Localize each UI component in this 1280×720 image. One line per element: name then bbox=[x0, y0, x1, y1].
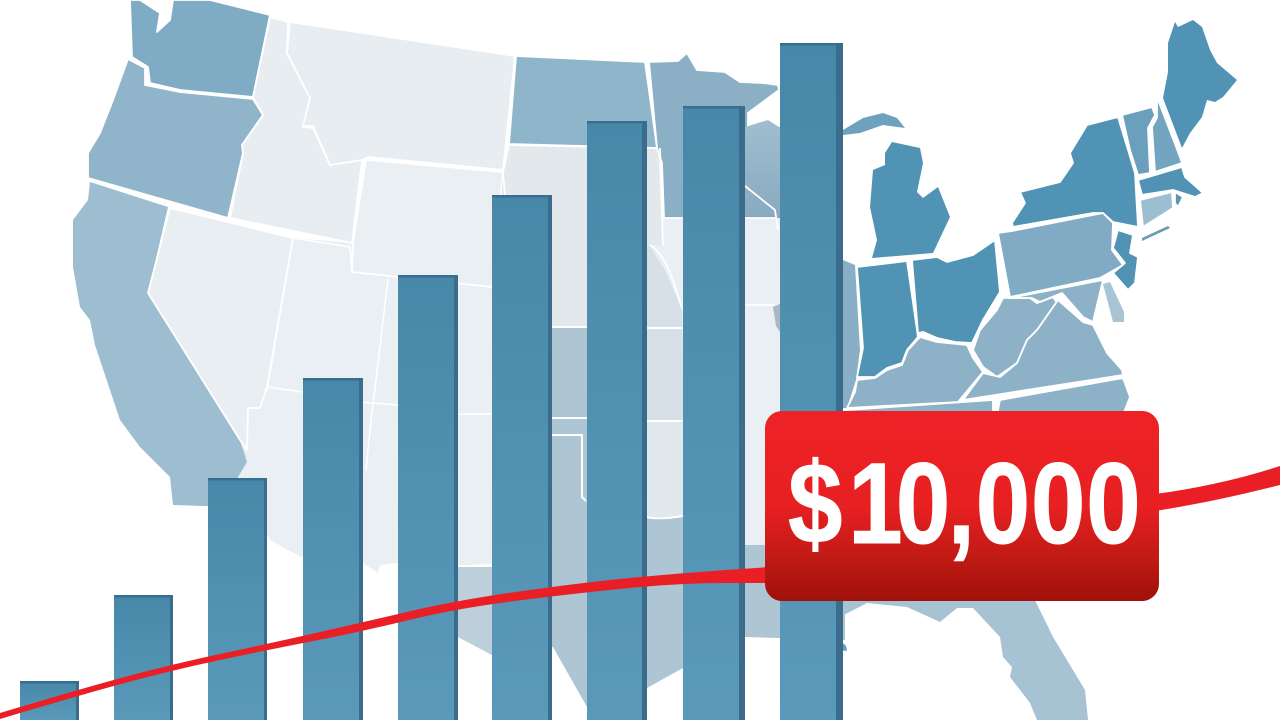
Idaho bbox=[230, 17, 362, 243]
Indiana bbox=[857, 261, 918, 377]
central states base bbox=[238, 150, 780, 573]
Missouri area bbox=[646, 246, 684, 421]
Michigan upper peninsula bbox=[843, 113, 905, 135]
Florida and Gulf coast bbox=[840, 590, 1088, 720]
Maryland bbox=[1010, 280, 1103, 322]
red trend line left bbox=[0, 567, 770, 719]
red trend line right bbox=[1155, 466, 1280, 511]
Rhode Island bbox=[1175, 192, 1183, 207]
Ohio bbox=[912, 240, 1000, 343]
Kansas and Oklahoma borders bbox=[456, 327, 684, 566]
South Dakota and Nebraska bbox=[492, 146, 662, 327]
bar 3 bbox=[208, 478, 267, 720]
bar 6 bbox=[492, 195, 552, 720]
Washington bbox=[130, 0, 270, 97]
Wisconsin bbox=[745, 120, 785, 218]
bar chart bbox=[20, 43, 843, 720]
North Carolina bbox=[997, 378, 1130, 415]
Texas and south central bbox=[456, 327, 845, 707]
New Jersey bbox=[1113, 230, 1138, 290]
bar 9 bbox=[780, 43, 843, 720]
Vermont bbox=[1122, 107, 1155, 175]
Montana bbox=[287, 22, 515, 170]
Illinois boundary lines bbox=[650, 148, 778, 310]
Minnesota bbox=[649, 53, 779, 218]
Massachusetts bbox=[1138, 167, 1203, 197]
bar 4 bbox=[303, 378, 363, 720]
Nevada bbox=[148, 208, 293, 450]
Michigan lower peninsula bbox=[870, 142, 950, 258]
Oregon bbox=[88, 59, 263, 218]
Kansas area bbox=[646, 421, 684, 517]
California bbox=[73, 182, 247, 507]
callout: $10,000 bbox=[765, 411, 1159, 601]
Pennsylvania bbox=[998, 213, 1123, 297]
bar 1 bbox=[20, 681, 79, 720]
bar 7 bbox=[587, 121, 647, 720]
Illinois edge bbox=[838, 258, 860, 408]
Louisiana delta bbox=[840, 640, 847, 651]
Long Island bbox=[1142, 226, 1170, 241]
Texas west shade bbox=[456, 566, 494, 656]
West Virginia bbox=[973, 297, 1057, 377]
callout box bbox=[765, 411, 1159, 601]
New Hampshire bbox=[1152, 97, 1182, 172]
Tennessee bbox=[847, 400, 993, 420]
Connecticut bbox=[1140, 192, 1173, 227]
North Dakota bbox=[509, 56, 657, 148]
callout value: $10,000 bbox=[788, 438, 1141, 568]
Maine bbox=[1163, 20, 1237, 148]
bar 2 bbox=[114, 595, 173, 720]
Kentucky bbox=[847, 337, 983, 408]
bar 8 bbox=[683, 106, 745, 720]
Delaware and Eastern Shore bbox=[1103, 282, 1124, 322]
Virginia bbox=[963, 300, 1123, 400]
Wyoming bbox=[352, 160, 503, 287]
New York bbox=[1012, 117, 1138, 227]
Missouri edge bbox=[773, 303, 782, 335]
South Dakota border bbox=[503, 145, 509, 196]
bar 5 bbox=[398, 275, 458, 720]
Utah, Colorado and southwest borders bbox=[267, 238, 492, 470]
